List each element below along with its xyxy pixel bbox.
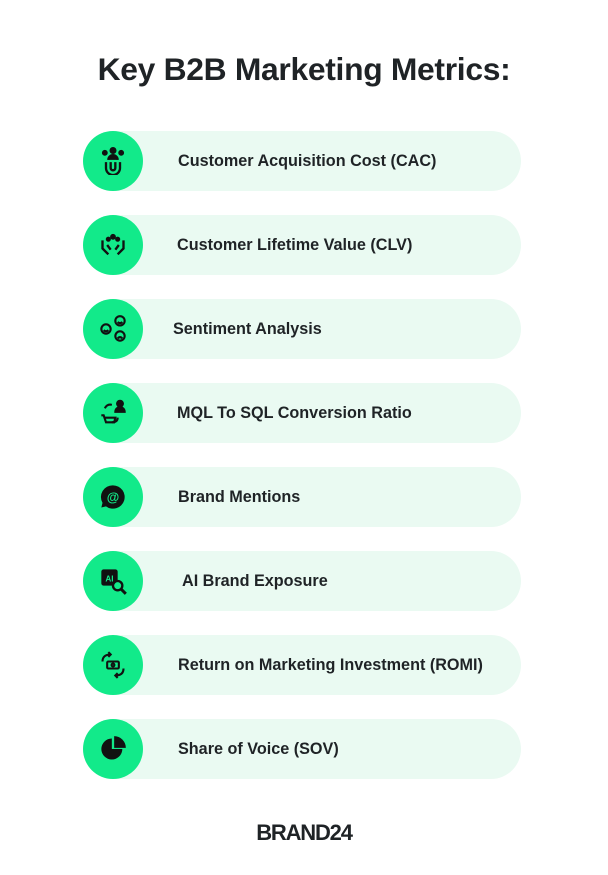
row: Sentiment: Sentiment Analysis <box>173 320 322 338</box>
icon: chat at <box>83 467 143 527</box>
icon: pie <box>83 719 143 779</box>
row: MQL: MQL To SQL Conversion Ratio <box>177 404 412 422</box>
icon: cart and person <box>83 383 143 443</box>
logo: BRAND24 <box>256 820 352 845</box>
row: Sentiment <box>83 299 521 359</box>
row: CLV: Customer Lifetime Value (CLV) <box>177 236 412 254</box>
icon: hands <box>83 215 143 275</box>
icon: AI chip search <box>83 551 143 611</box>
row: CAC <box>83 131 521 191</box>
row: ROMI <box>83 635 521 695</box>
icon: money arrows <box>83 635 143 695</box>
row: CLV <box>83 215 521 275</box>
title: Key B2B Marketing Metrics: <box>98 51 510 87</box>
row: ROMI: Return on Marketing Investment (ROMI) <box>178 656 483 674</box>
row: MQL <box>83 383 521 443</box>
row: SOV: Share of Voice (SOV) <box>178 740 339 758</box>
row: AI: AI Brand Exposure <box>182 572 328 590</box>
row: Brand Mentions <box>83 467 521 527</box>
row: Brand Mentions: Brand Mentions <box>178 488 300 506</box>
row: AI <box>83 551 521 611</box>
icon: people magnet <box>83 131 143 191</box>
icon: AI chip search: AI <box>105 575 114 584</box>
icon: chat at: @ <box>107 490 119 505</box>
row: CAC: Customer Acquisition Cost (CAC) <box>178 152 436 170</box>
icon: faces <box>83 299 143 359</box>
row: SOV <box>83 719 521 779</box>
